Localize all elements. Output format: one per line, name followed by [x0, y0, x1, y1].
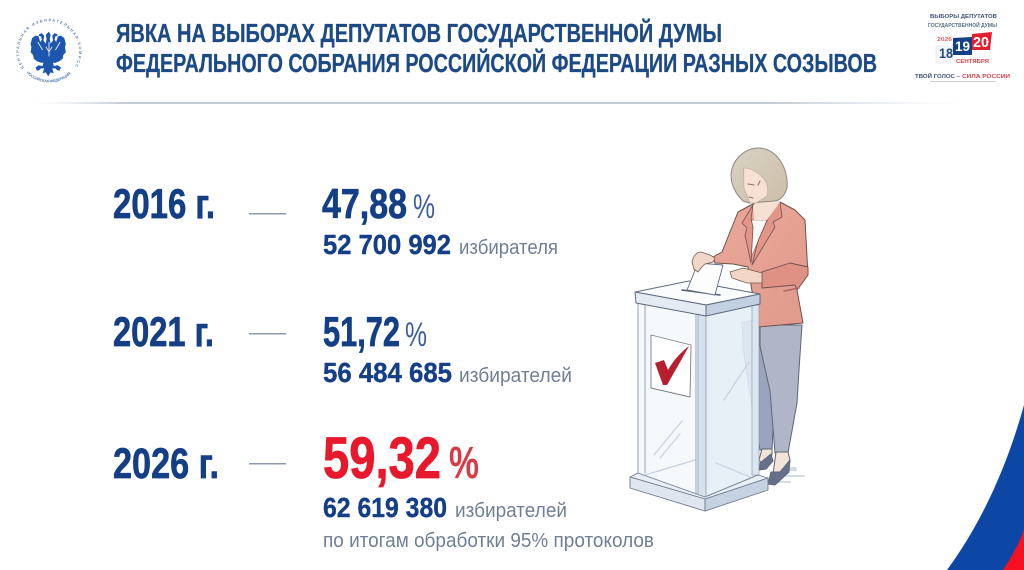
woman: jacket: [713, 202, 808, 327]
election logo: ТВОЙ ГОЛОС –: [915, 72, 960, 80]
election logo: 19: [955, 38, 970, 54]
woman: legs: [742, 320, 802, 485]
row: 2026: %: [449, 437, 479, 488]
row: 2026: 59,32: [323, 426, 441, 491]
election logo: [915, 14, 1010, 82]
illustration: woman voting at ballot box: [630, 148, 808, 511]
row: 2021: 51,72: [323, 308, 400, 355]
header divider: [30, 102, 965, 104]
title: ЯВКА НА ВЫБОРАХ ДЕПУТАТОВ ГОСУДАРСТВЕННОЙ ДУМЫ: [116, 18, 722, 48]
woman: hand and ballot: [687, 252, 723, 295]
emblem: election commission: [16, 18, 82, 82]
election logo: СИЛА РОССИИ: [962, 74, 1010, 80]
row: 2016: 52 700 992: [323, 229, 451, 260]
election logo: 20: [973, 34, 989, 51]
row: 2026: 62 619 380: [323, 492, 447, 523]
title: [116, 18, 877, 78]
row: 2016: 2016 г.: [113, 180, 215, 227]
ballot sheet with red check mark: [651, 335, 691, 397]
row: 2026: избирателей: [455, 500, 567, 522]
floor shadow: [776, 468, 804, 482]
woman: neck and face: [731, 148, 787, 220]
row: 2016: 47,88: [322, 180, 407, 227]
election logo: ГОСУДАРСТВЕННОЙ ДУМЫ: [928, 21, 997, 29]
ballot box base: [630, 473, 768, 511]
row: 2016: [113, 180, 558, 260]
election logo: 2026: [937, 37, 952, 43]
row: 2026: 2026 г.: [113, 440, 219, 488]
election logo: ВЫБОРЫ ДЕПУТАТОВ: [930, 14, 997, 20]
row: 2026: [113, 426, 654, 552]
row: 2021: %: [405, 316, 427, 354]
ballot box body: [638, 303, 759, 498]
corner flag: tricolor swoosh: [947, 405, 1024, 570]
row: 2021: избирателей: [459, 365, 572, 387]
emblem: election commission: РОССИЙСКАЯ ФЕДЕРАЦИЯ: [26, 71, 70, 82]
row: 2021: 2021 г.: [113, 308, 214, 355]
row: 2021: 56 484 685: [323, 357, 452, 388]
row: 2016: %: [413, 188, 435, 226]
row: 2026: по итогам обработки 95% протоколов: [323, 530, 654, 552]
ballot box lid: [635, 281, 760, 316]
row: 2021: [113, 308, 572, 388]
election logo: 18: [939, 45, 953, 61]
row: 2016: избирателя: [459, 237, 558, 259]
election logo: СЕНТЯБРЯ: [956, 59, 989, 65]
